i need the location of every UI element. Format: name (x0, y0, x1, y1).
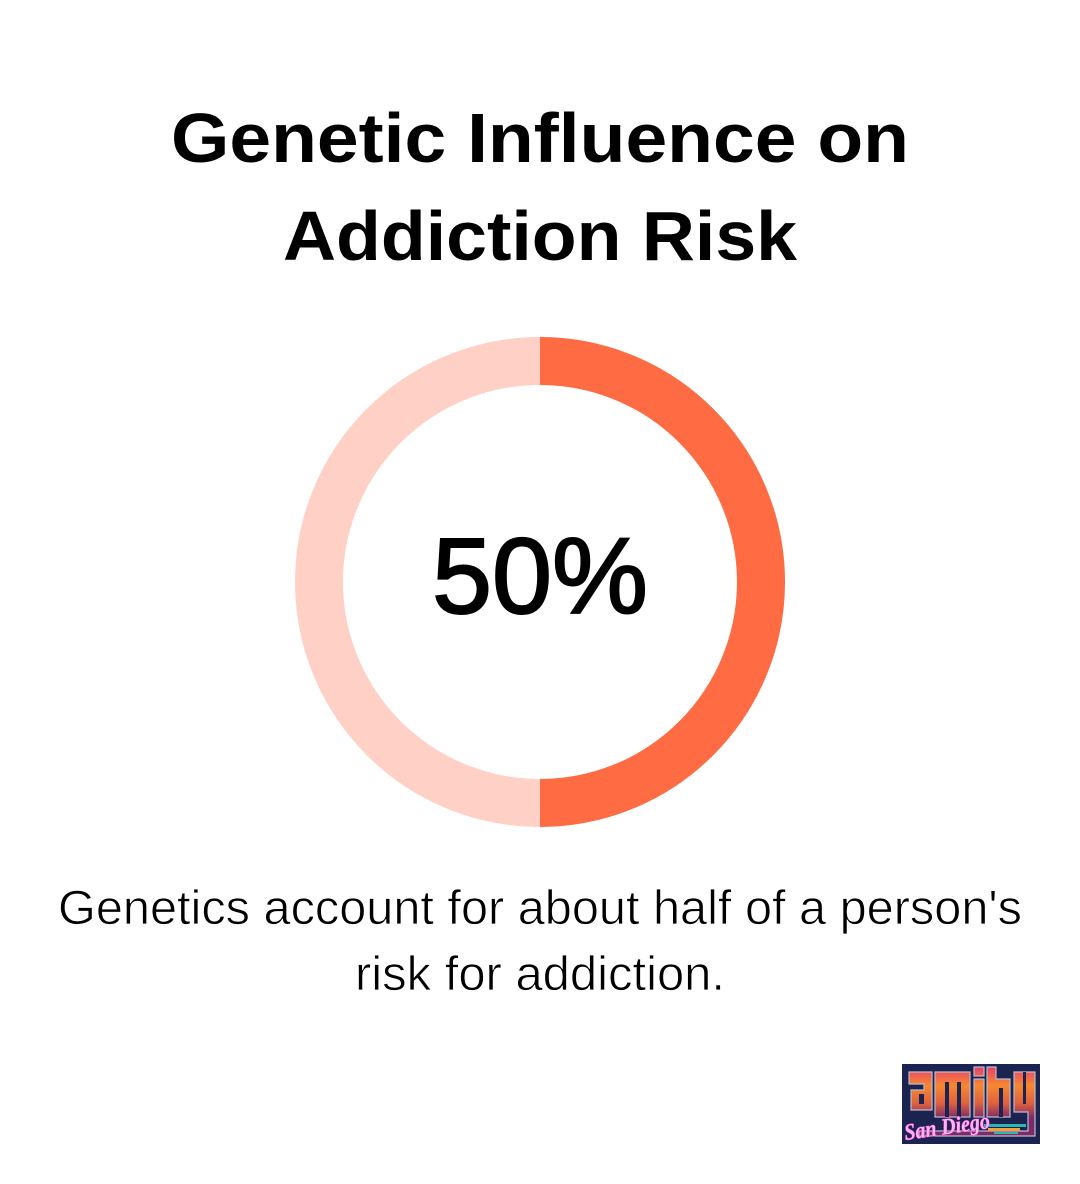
description text: risk for addiction. (355, 948, 725, 1001)
title (171, 99, 909, 275)
title: Addiction Risk (283, 197, 797, 275)
title: Genetic Influence on (171, 99, 909, 177)
logo: Amity San Diego (902, 1064, 1040, 1145)
description text (58, 882, 1022, 1001)
logo letter gaps (919, 1072, 1026, 1117)
logo script: San Diego: San Diego (903, 1108, 991, 1145)
description text: Genetics account for about half of a person's (58, 882, 1022, 935)
donut chart: 50% (319, 361, 761, 803)
logo block letters (909, 1067, 1035, 1136)
center value: 50% (432, 515, 648, 636)
logo streaks (984, 1124, 1026, 1134)
